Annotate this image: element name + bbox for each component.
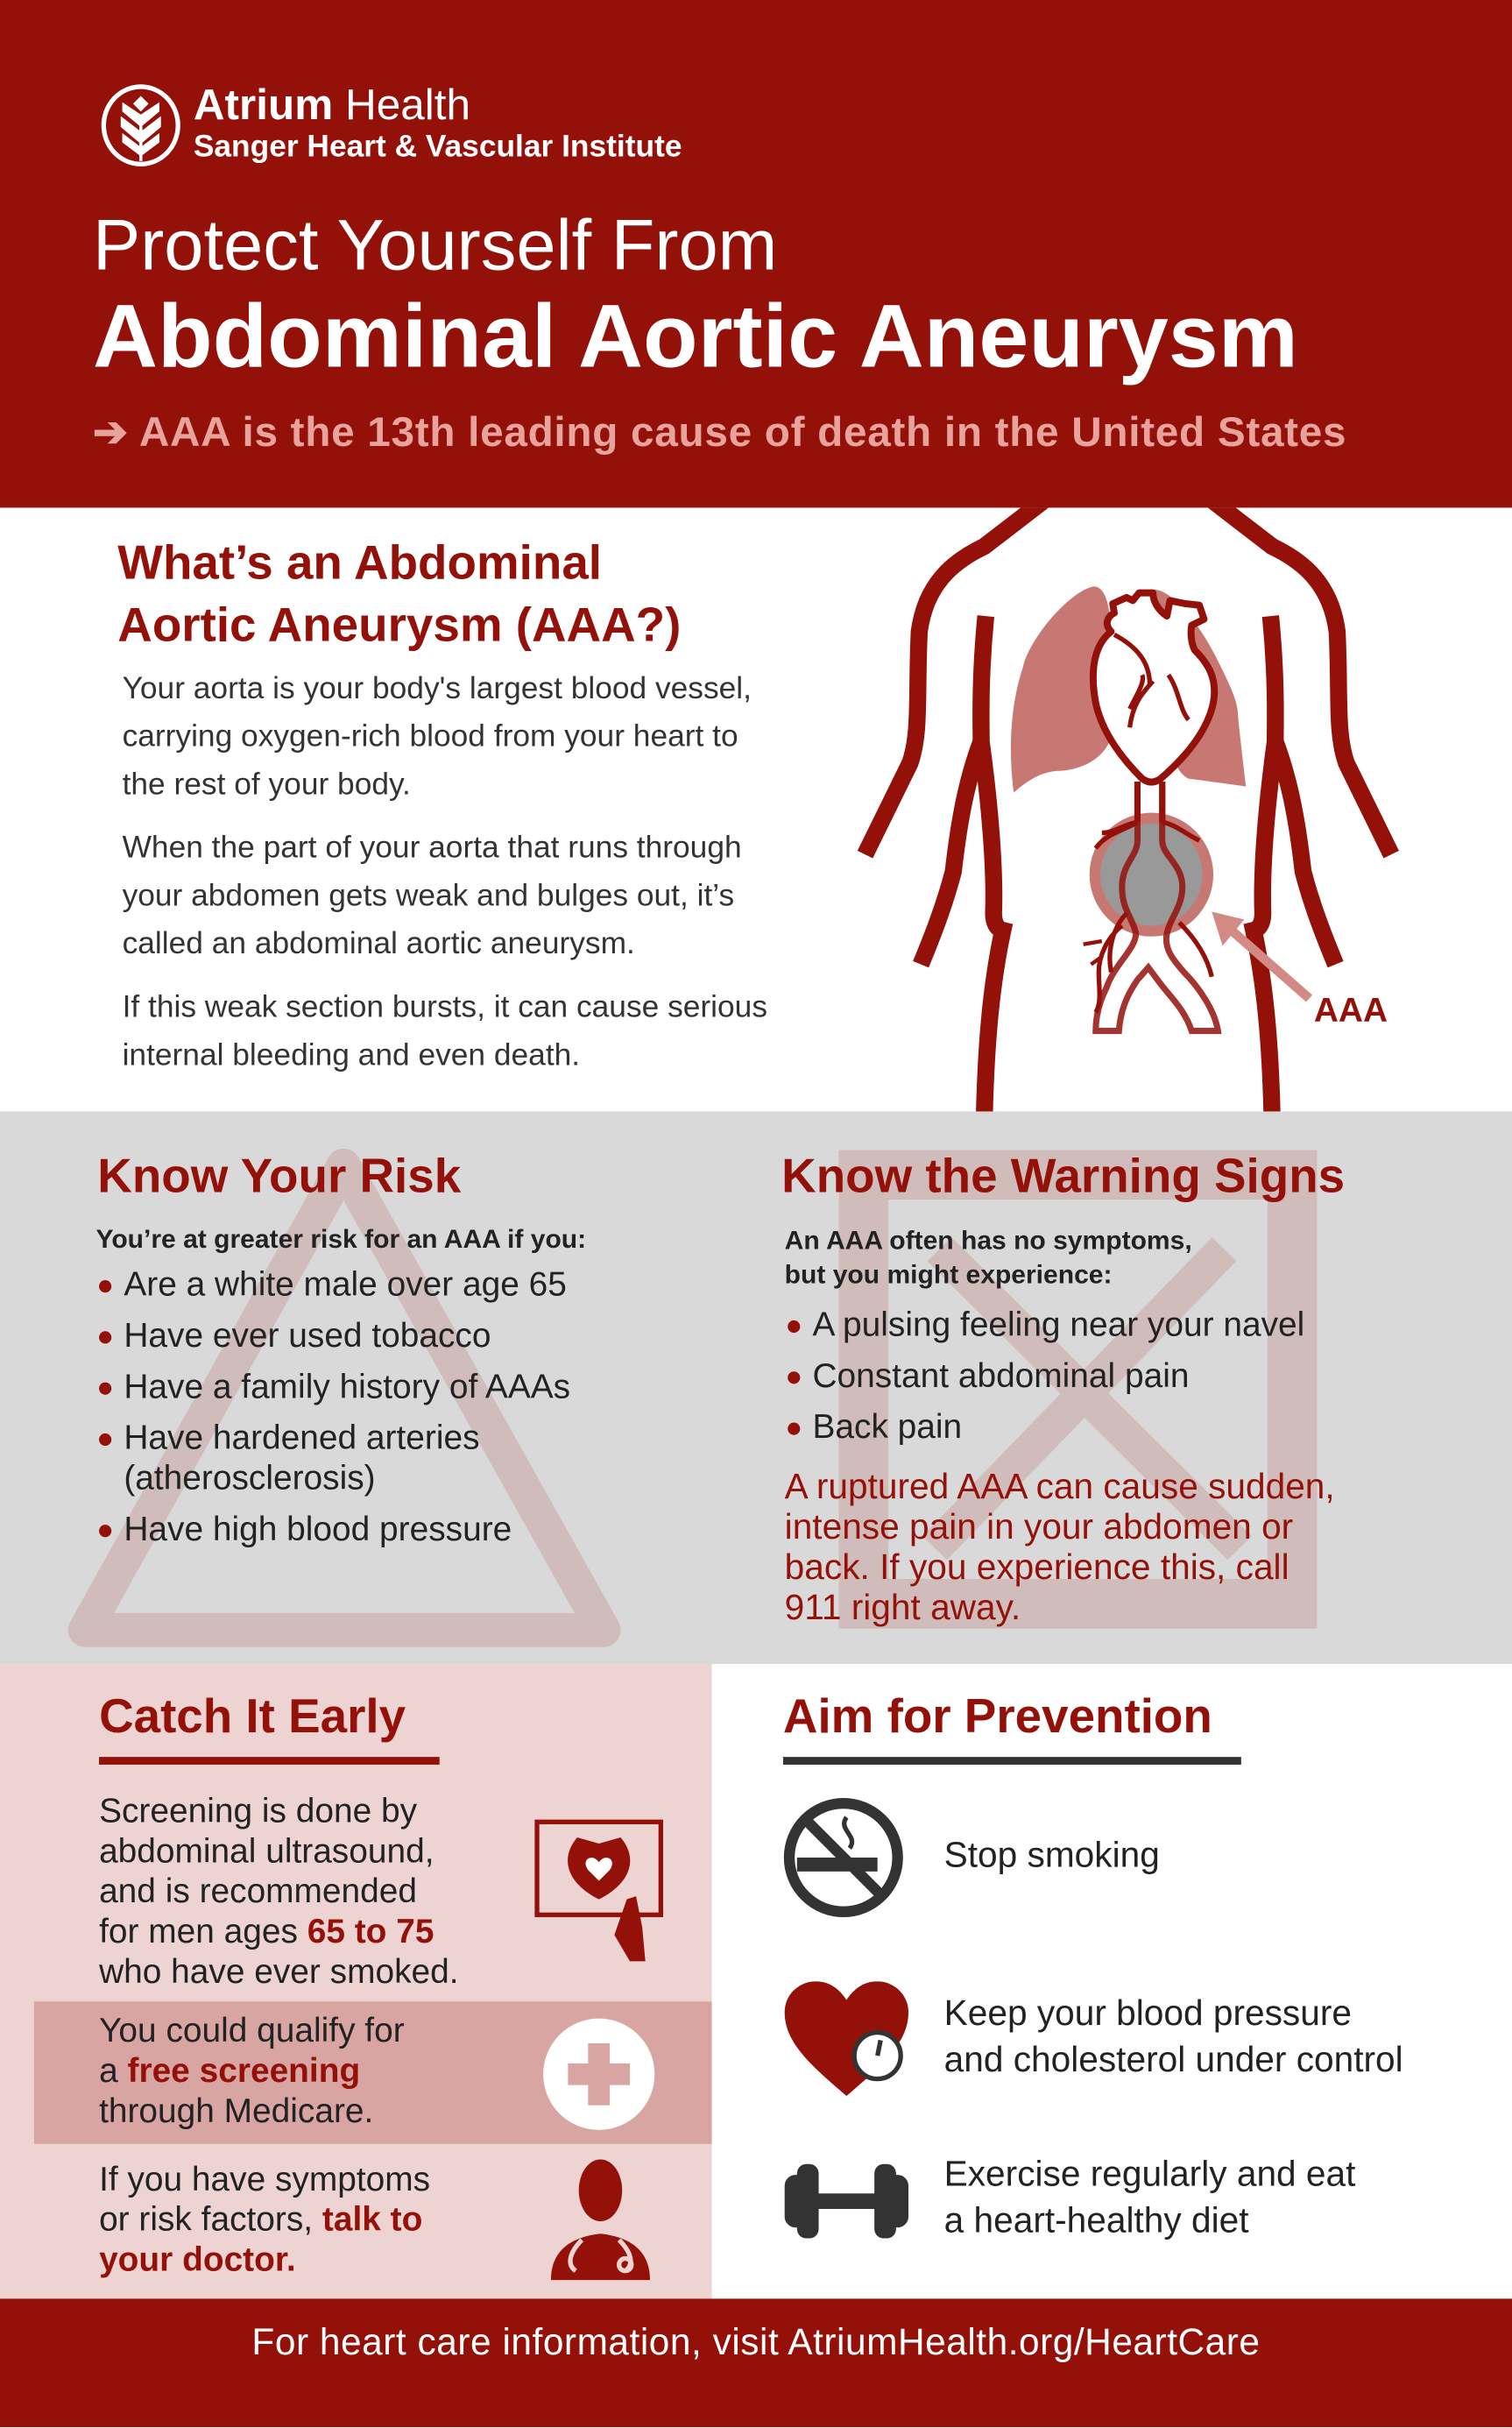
heart: [1093, 593, 1214, 782]
text: screening: [99, 1791, 459, 1991]
subtitle stat: ➔ AAA is the 13th leading cause of death in the United States: [93, 408, 1346, 455]
icon: leaf logo: [102, 84, 180, 166]
text block: Your aorta is your body's largest blood vessel,: [123, 672, 752, 706]
text block: [123, 672, 767, 1072]
arrow: [1223, 923, 1310, 998]
warning list: A pulsing feeling near your navel: [812, 1305, 1304, 1343]
icon: medical cross: [543, 2019, 655, 2130]
icon: alert box watermark: [839, 1150, 1318, 1628]
text: screening: Screening is done by: [99, 1791, 417, 1830]
text: exercise: [944, 2153, 1356, 2240]
text block: the rest of your body.: [123, 768, 411, 802]
warning list: Back pain: [812, 1407, 962, 1446]
text: exercise: a heart-healthy diet: [944, 2199, 1249, 2240]
lungs: [1011, 586, 1110, 793]
icon: warning triangle watermark: [68, 1149, 620, 1647]
footer: For heart care information, visit AtriumHealth.org/HeartCare: [251, 2322, 1261, 2364]
title: Abdominal Aortic Aneurysm: [93, 287, 1298, 387]
logo: [102, 81, 682, 166]
aorta: [1096, 782, 1218, 1031]
panel: what is AAA: [0, 507, 1512, 1111]
highlight band: free screening: a free screening: [99, 2051, 360, 2090]
risk list: You’re at greater risk for an AAA if you:: [96, 1224, 586, 1254]
icon: no smoking: [783, 1798, 903, 1917]
text: blood pressure: and cholesterol under control: [944, 2039, 1403, 2079]
text block: called an abdominal aortic aneurysm.: [123, 927, 635, 961]
risk list: Have hardened arteries: [124, 1418, 480, 1456]
body illustration: AAA: [1314, 992, 1388, 1030]
highlight band: free screening: through Medicare.: [99, 2092, 373, 2130]
text: talk to doctor: If you have symptoms: [99, 2159, 430, 2198]
text: talk to doctor: or risk factors, talk to: [99, 2199, 422, 2239]
callout: ruptured: A ruptured AAA can cause sudden,: [785, 1466, 1335, 1506]
heading: know your risk: Know Your Risk: [97, 1149, 461, 1203]
heading: Aortic Aneurysm (AAA?): [117, 598, 681, 652]
risk list: (atherosclerosis): [124, 1458, 376, 1497]
heading: Aim for Prevention: [783, 1688, 1212, 1743]
bulge: [1090, 812, 1213, 937]
panel: catch it early: [0, 1664, 712, 2298]
text: talk to doctor: your doctor.: [99, 2240, 296, 2278]
heading: What’s an Abdominal: [117, 535, 602, 590]
header banner: [0, 0, 1512, 507]
text block: When the part of your aorta that runs through: [123, 832, 742, 866]
heading: [117, 535, 681, 652]
text: screening: who have ever smoked.: [99, 1952, 459, 1991]
text: screening: for men ages 65 to 75: [99, 1912, 434, 1950]
callout: ruptured: [785, 1466, 1335, 1627]
highlight band: free screening: [34, 2001, 712, 2144]
text: stop smoking: Stop smoking: [944, 1834, 1160, 1874]
text: exercise: Exercise regularly and eat: [944, 2153, 1355, 2193]
text block: your abdomen gets weak and bulges out, it’s: [123, 879, 734, 913]
text: blood pressure: Keep your blood pressure: [944, 1993, 1352, 2033]
text block: internal bleeding and even death.: [123, 1038, 580, 1072]
icon: doctor: [550, 2159, 650, 2280]
highlight band: free screening: You could qualify for: [99, 2011, 405, 2049]
icon: ultrasound: [534, 1819, 663, 1961]
body illustration: [857, 508, 1399, 1111]
callout: ruptured: back. If you experience this, call: [785, 1547, 1289, 1587]
icon: dumbbell: [785, 2164, 908, 2238]
title: Protect Yourself From: [93, 204, 777, 285]
title: [93, 204, 1298, 387]
icon: heart gauge: [785, 1981, 908, 2096]
text: talk to doctor: [99, 2159, 430, 2278]
footer: [0, 2298, 1512, 2427]
heading: Catch It Early: [99, 1688, 406, 1743]
warning list: Constant abdominal pain: [812, 1356, 1189, 1395]
warning list: but you might experience:: [785, 1260, 1112, 1290]
text block: carrying oxygen-rich blood from your heart to: [123, 719, 738, 754]
logo: Atrium Health: [194, 81, 470, 129]
text: blood pressure: [944, 1993, 1403, 2079]
logo: Sanger Heart & Vascular Institute: [194, 130, 682, 164]
warning list: An AAA often has no symptoms,: [785, 1226, 1192, 1256]
risk list: Are a white male over age 65: [124, 1264, 567, 1304]
text: screening: and is recommended: [99, 1872, 417, 1910]
panel: risk and warning signs: [0, 1111, 1512, 1664]
risk list: Have a family history of AAAs: [124, 1367, 570, 1405]
heading: warning signs: Know the Warning Signs: [781, 1149, 1345, 1203]
text: screening: abdominal ultrasound,: [99, 1831, 435, 1870]
risk list: [96, 1224, 586, 1548]
callout: ruptured: intense pain in your abdomen or: [785, 1506, 1293, 1547]
risk list: Have high blood pressure: [124, 1509, 512, 1548]
risk list: Have ever used tobacco: [124, 1316, 491, 1355]
text block: If this weak section bursts, it can cause serious: [123, 991, 767, 1025]
callout: ruptured: 911 right away.: [785, 1587, 1021, 1627]
warning list: [785, 1226, 1335, 1627]
panel: aim for prevention: [712, 1664, 1512, 2298]
